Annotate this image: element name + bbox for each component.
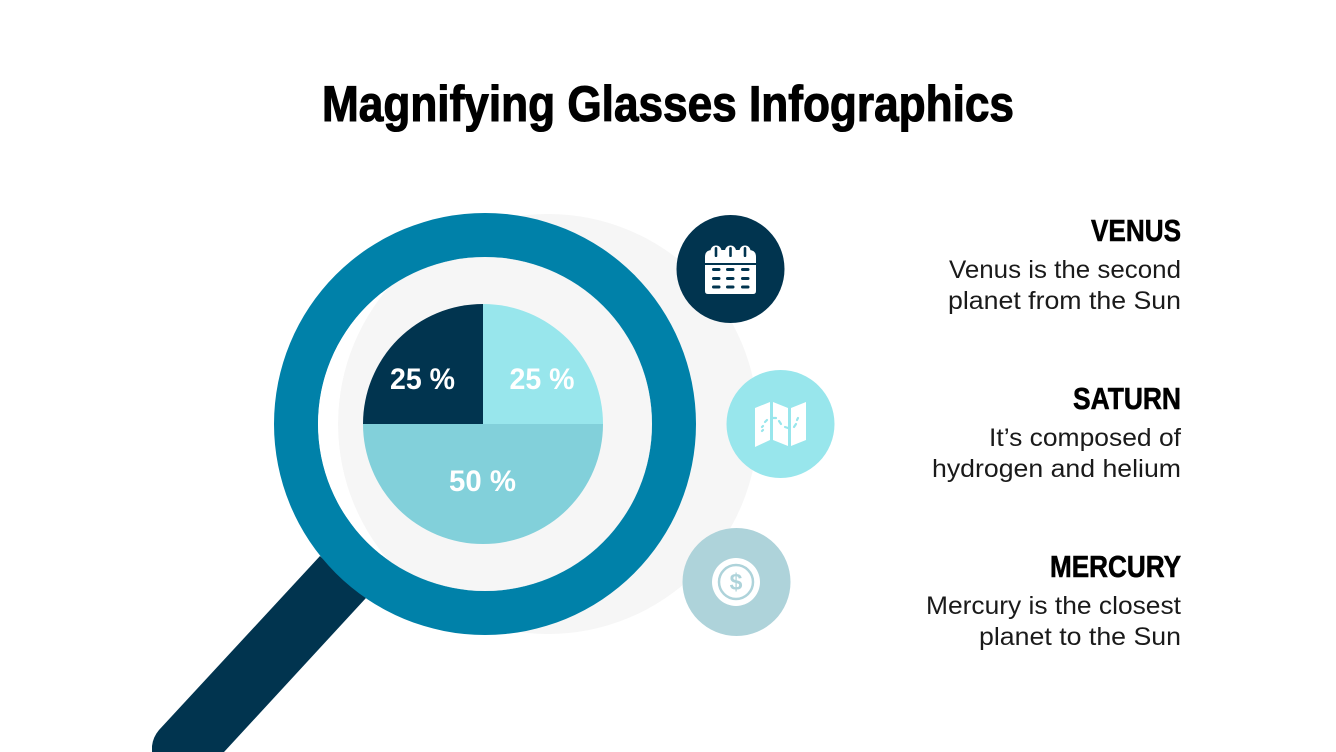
text block: Venus: planet from the Sun — [948, 287, 1181, 315]
slice: 25% dark — [363, 304, 483, 424]
slice: 25% light — [483, 304, 603, 424]
icon: dollar coin — [682, 528, 790, 636]
slice: 50% — [363, 424, 603, 544]
text block: Saturn — [932, 381, 1181, 483]
pie chart — [363, 304, 603, 544]
text block: Mercury: planet to the Sun — [979, 623, 1181, 651]
icon: dollar coin: $ — [730, 569, 743, 595]
magnifying glass — [152, 213, 758, 752]
text block: Saturn: It’s composed of — [989, 424, 1181, 452]
text block: Venus — [948, 213, 1181, 315]
slice: 25% light: 25 % — [510, 363, 574, 396]
title: Magnifying Glasses Infographics — [322, 76, 1014, 132]
text block: Venus: VENUS — [1091, 213, 1181, 248]
text block: Mercury — [926, 549, 1181, 651]
lens background circle — [338, 214, 758, 634]
lens crescent — [318, 257, 652, 591]
handle — [152, 556, 366, 752]
slice: 25% dark: 25 % — [390, 363, 455, 396]
text block: Mercury: Mercury is the closest — [926, 592, 1181, 620]
text block: Venus: Venus is the second — [949, 256, 1181, 284]
icon: calendar — [676, 215, 784, 323]
lens ring — [274, 213, 696, 635]
icon: map — [726, 370, 834, 478]
slice: 50%: 50 % — [449, 465, 516, 498]
text block: Saturn: SATURN — [1073, 381, 1181, 416]
text block: Saturn: hydrogen and helium — [932, 455, 1181, 483]
text block: Mercury: MERCURY — [1050, 549, 1181, 584]
